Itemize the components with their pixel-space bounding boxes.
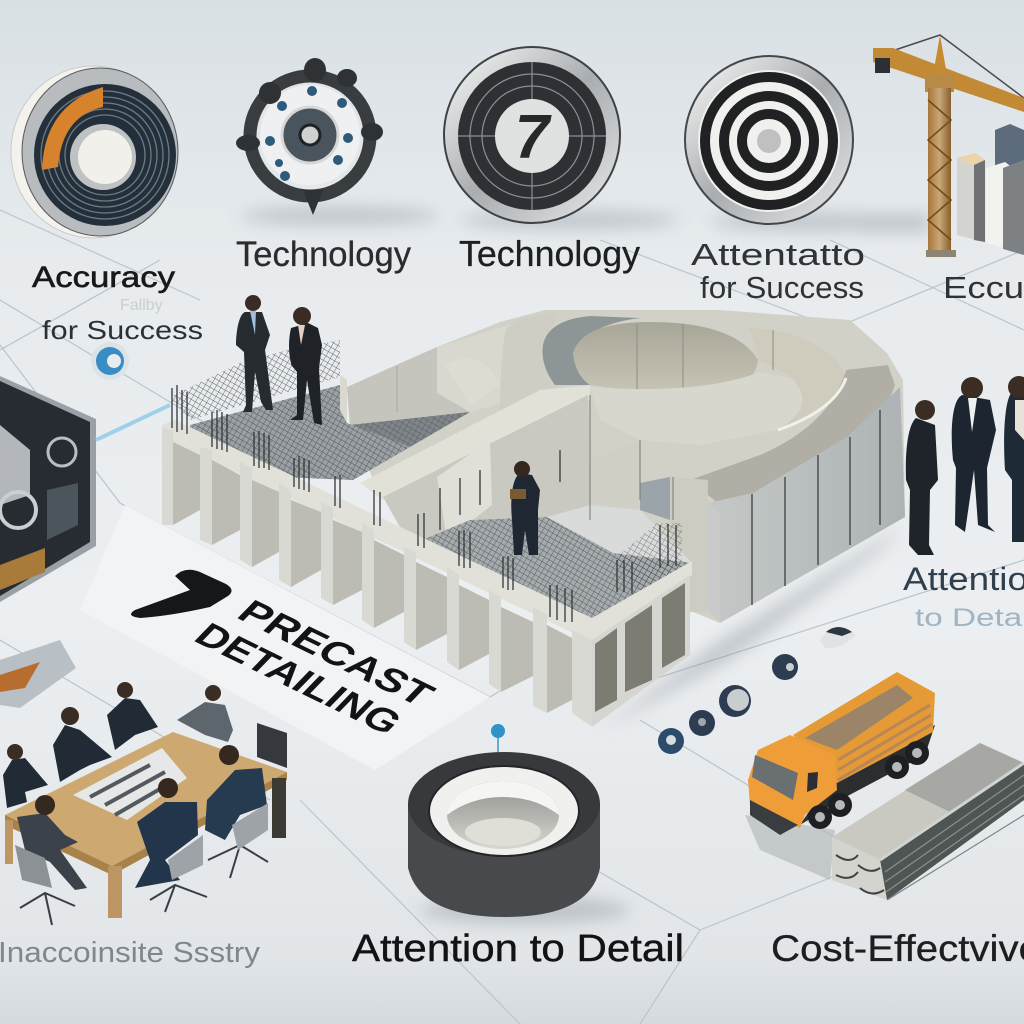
truck (745, 672, 935, 880)
concrete panels stack (832, 743, 1024, 900)
soft shadows (240, 207, 930, 924)
precast structure (162, 310, 905, 727)
heading: accuracy for success: Accuracy (32, 261, 175, 294)
panel: monitor (0, 376, 170, 602)
heading: technology 1: Technology (236, 235, 411, 274)
left edge object (0, 640, 76, 708)
heading: attention to detail clipped: to Detail (915, 604, 1024, 632)
rebar clusters (172, 385, 676, 622)
badge: blue dot (91, 342, 129, 380)
fence behind left deck (170, 340, 340, 420)
column tops and faces (162, 420, 692, 642)
heading: cost-effective: Cost-Effectvive (771, 928, 1024, 969)
pin marker (491, 724, 505, 760)
heading: technology 2: Technology (459, 233, 640, 274)
icon: seven dial: 7 (515, 103, 552, 172)
heading: attention to detail clipped (903, 561, 1024, 632)
chart: concrete bars (957, 124, 1024, 255)
heading: accuracy for success (32, 261, 203, 345)
banner: 7 precast detailing (80, 505, 490, 770)
front people (17, 813, 87, 890)
heading: attention for success: Attentatto (691, 237, 865, 272)
icon: concentric target (685, 56, 853, 224)
banner: 7 precast detailing: PRECAST (229, 593, 444, 713)
heading: attention to detail: Attention to Detail (352, 928, 684, 970)
icon: technology gear (236, 58, 383, 215)
heading: blurred consistency: Inaccoinsite Ssstry (0, 937, 261, 969)
blueprint (73, 748, 187, 820)
person: on front deck (510, 461, 540, 555)
crane (873, 35, 1024, 257)
icon: accuracy dial (11, 66, 178, 238)
table (5, 732, 287, 866)
heading: accuracy for success: Fallby (120, 297, 163, 314)
meeting table group (3, 682, 287, 925)
people: right group (906, 376, 1024, 555)
precast ring (408, 752, 600, 917)
small icon dots (658, 627, 856, 754)
heading: attention for success: for Success (700, 270, 864, 305)
heading: accuracy for success: for Success (42, 315, 203, 345)
icon: seven dial (444, 47, 620, 223)
heading: attention for success (691, 237, 865, 305)
chairs (20, 845, 268, 925)
people: two on deck (236, 295, 322, 425)
banner: 7 precast detailing: DETAILING (186, 616, 411, 741)
heading: attention to detail clipped: Attentio (903, 561, 1024, 597)
